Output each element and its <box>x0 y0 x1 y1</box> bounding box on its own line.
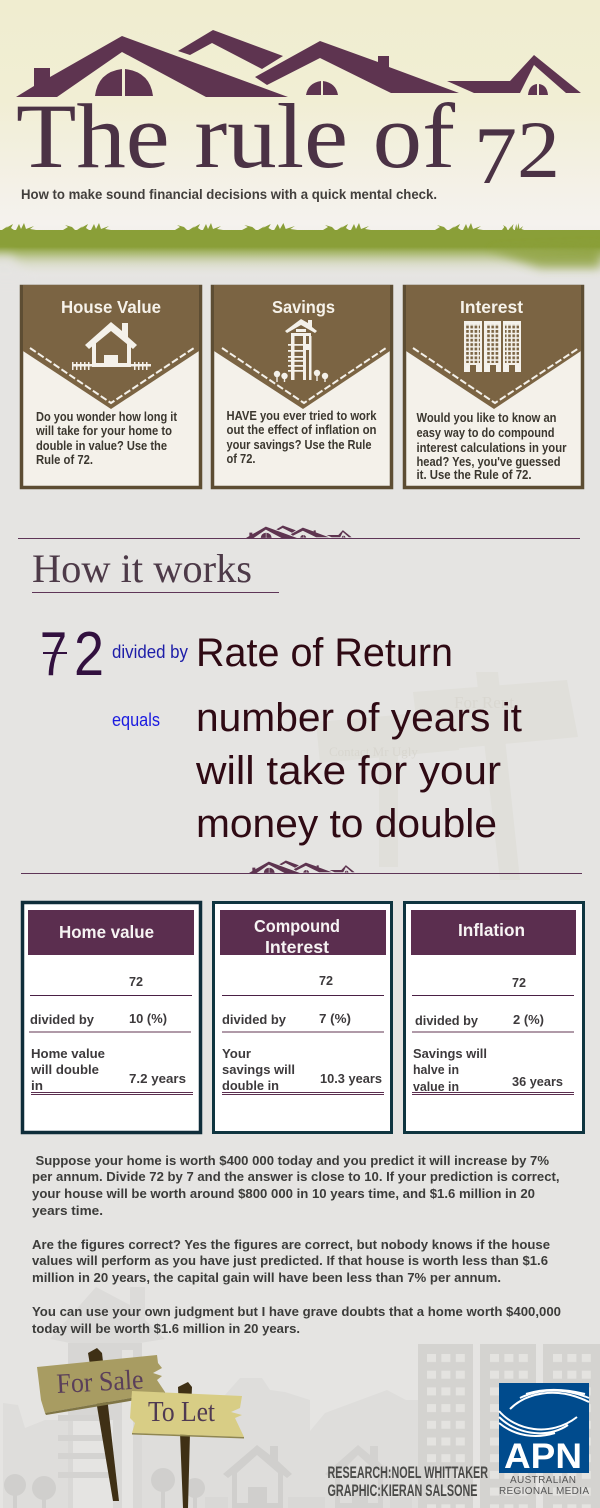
title: 2 <box>517 104 560 195</box>
formula: result: money to double <box>196 802 497 846</box>
table rows <box>29 975 193 1094</box>
formula: 72 <box>40 620 104 689</box>
heading: savings: Savings <box>272 297 335 317</box>
faint background sign <box>316 672 578 880</box>
explanation text: your house will be worth around $800 000 in 10 years time, and $1.6 million in 20 <box>32 1186 535 1201</box>
body text: easy way to do compound <box>416 426 554 440</box>
formula: result: will take for your <box>195 749 501 793</box>
table rows <box>222 974 384 1094</box>
table rows: 72 <box>512 976 526 990</box>
logo: APN <box>499 1383 589 1497</box>
table header <box>220 910 386 957</box>
body text: HAVE you ever tried to work <box>226 409 377 423</box>
table rows: 10.3 years <box>320 1072 382 1086</box>
body text: Do you wonder how long it <box>36 410 178 424</box>
faint background sign: Contact Mr Ugly <box>329 744 418 759</box>
faint background sign: For Rent <box>454 693 514 712</box>
table header <box>28 910 194 955</box>
label: equals: equals <box>112 710 160 730</box>
explanation text: today will be worth $1.6 million in 20 years. <box>32 1321 300 1336</box>
table rows <box>412 976 574 1094</box>
formula: 72: 7 <box>40 620 67 689</box>
body text: interest calculations in your <box>416 441 567 455</box>
body text <box>416 411 567 482</box>
body text: will take for your home to <box>35 424 172 438</box>
table rows: will double <box>30 1063 99 1077</box>
logo: APN: REGIONAL MEDIA <box>499 1486 589 1497</box>
panel: house value <box>22 285 200 488</box>
credits: RESEARCH:NOEL WHITTAKER <box>328 1464 488 1482</box>
table rows: divided by <box>222 1013 286 1027</box>
dashed stitch <box>222 348 386 403</box>
title: 7 <box>474 110 517 201</box>
label: divided by: divided by <box>112 642 188 662</box>
table rows: 72 <box>319 974 333 988</box>
table rows: 2 (%) <box>513 1013 544 1027</box>
logo: rooftops <box>16 30 581 97</box>
background silhouette: bottom city <box>3 1287 600 1508</box>
sign: to let <box>130 1382 244 1508</box>
divider with rooftops <box>18 526 580 539</box>
table rows: value in <box>413 1080 459 1094</box>
table: inflation <box>404 902 584 1132</box>
icon: tower house <box>274 319 328 382</box>
formula: rate of return: Rate of Return <box>196 631 453 675</box>
sign: for sale: For Sale <box>56 1364 144 1400</box>
body text <box>35 410 178 467</box>
icon: house <box>72 322 151 370</box>
table rows: 7 (%) <box>319 1012 351 1026</box>
table rows: Your <box>222 1047 251 1061</box>
logo: APN: APN <box>504 1437 582 1476</box>
body text: double in value? Use the <box>36 439 167 453</box>
table rows: halve in <box>413 1063 459 1077</box>
sign: for sale <box>37 1348 166 1501</box>
table rows: Savings will <box>413 1047 487 1061</box>
title: The rule of <box>16 85 455 187</box>
heading: house value: House Value <box>61 297 161 317</box>
table rows: divided by <box>415 1014 478 1028</box>
formula: result <box>195 696 522 846</box>
logo: APN: AUSTRALIAN <box>510 1475 576 1486</box>
body text: it. Use the Rule of 72. <box>416 468 532 482</box>
brown header chevron <box>406 285 581 409</box>
table rows: Home value <box>31 1047 105 1061</box>
table header: Compound <box>254 916 340 936</box>
table rows: 36 years <box>512 1075 563 1089</box>
credits: GRAPHIC:KIERAN SALSONE <box>328 1482 478 1500</box>
body text: out the effect of inflation on <box>226 423 376 437</box>
table header <box>411 910 576 955</box>
subtitle: How to make sound financial decisions with a quick mental check. <box>21 187 437 202</box>
panel: savings <box>212 285 392 488</box>
brown header chevron <box>214 285 390 409</box>
sign: to let: To Let <box>148 1397 215 1428</box>
explanation text: Are the figures correct? Yes the figures are correct, but nobody knows if the house <box>32 1237 550 1252</box>
explanation text: per annum. Divide 72 by 7 and the answer is close to 10. If your prediction is correct, <box>32 1169 560 1184</box>
formula: result: number of years it <box>196 696 522 740</box>
heading: how it works: How it works <box>32 546 252 591</box>
formula: 72: 2 <box>74 620 104 689</box>
title <box>16 85 560 201</box>
table header: Interest <box>265 937 329 957</box>
table: compound interest <box>214 902 392 1132</box>
grass band <box>0 223 600 284</box>
table rows: 7.2 years <box>129 1072 186 1086</box>
table rows: 72 <box>129 975 143 989</box>
explanation text: You can use your own judgment but I have grave doubts that a home worth $400,000 <box>32 1304 561 1319</box>
dashed stitch <box>413 348 579 403</box>
brown header chevron <box>23 285 199 409</box>
divider with rooftops <box>21 861 582 874</box>
table: home value <box>22 902 200 1132</box>
icon: apartment towers <box>464 321 521 372</box>
table rows: 10 (%) <box>129 1012 167 1026</box>
explanation text: million in 20 years, the capital gain will have been less than 7% per annum. <box>32 1270 501 1285</box>
body text: head? Yes, you've guessed <box>416 455 560 469</box>
panel: interest <box>404 285 582 488</box>
table rows: double in <box>222 1079 279 1093</box>
explanation text <box>32 1153 561 1336</box>
heading: interest: Interest <box>460 297 523 317</box>
body text: of 72. <box>226 452 256 466</box>
explanation text: Suppose your home is worth $400 000 today and you predict it will increase by 7% <box>36 1153 549 1168</box>
table rows: divided by <box>30 1013 94 1027</box>
table header: Inflation <box>458 920 525 940</box>
body text <box>226 409 377 466</box>
table header: Home value <box>59 922 154 942</box>
body text: Rule of 72. <box>36 453 93 467</box>
table rows: savings will <box>222 1063 295 1077</box>
explanation text: years time. <box>32 1203 103 1218</box>
explanation text: values will perform as you have just predicted. If that house is worth less than $1.6 <box>32 1253 548 1268</box>
body text: your savings? Use the Rule <box>226 438 372 452</box>
table rows: in <box>31 1079 43 1093</box>
body text: Would you like to know an <box>416 411 556 425</box>
dashed stitch <box>30 348 194 403</box>
credits <box>328 1464 488 1500</box>
